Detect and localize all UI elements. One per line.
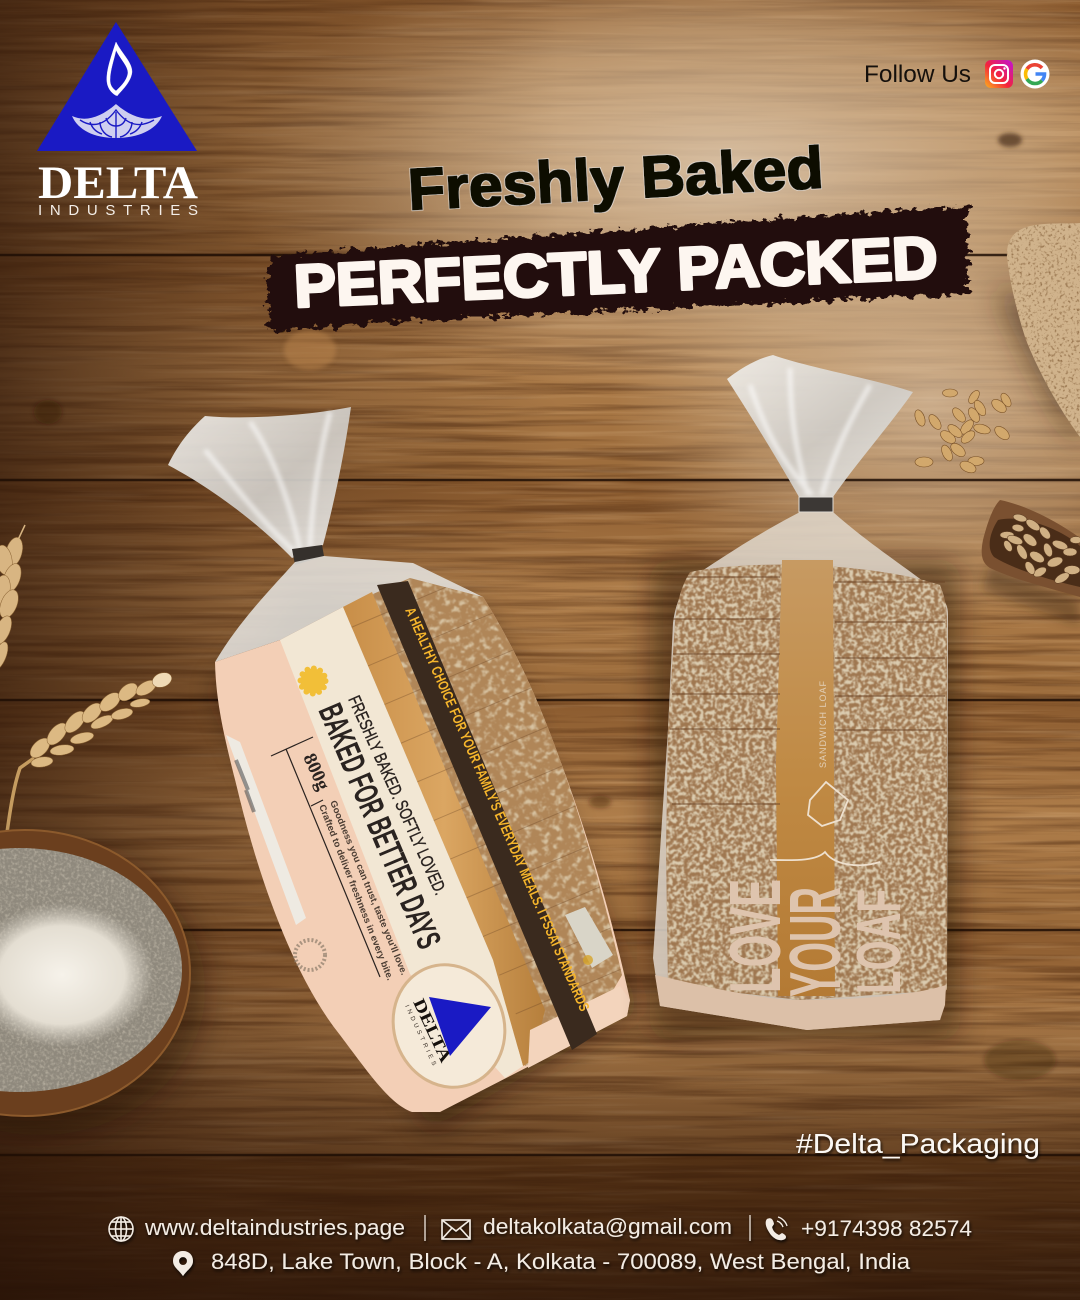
- hashtag: #Delta_Packaging: [796, 1128, 1040, 1159]
- bag shoulder: [215, 556, 483, 662]
- logo wordmark: DELTA: [38, 157, 198, 209]
- badge logo: INDUSTRIES: [403, 1004, 437, 1067]
- logo subline: INDUSTRIES: [38, 202, 198, 219]
- phone number: +9174398 82574: [801, 1216, 972, 1241]
- white side panel: [226, 735, 306, 925]
- website: www.deltaindustries.page: [144, 1215, 405, 1240]
- LOVE YOUR LOAF print: LOAF: [845, 889, 914, 994]
- plastic twist top: [168, 407, 351, 558]
- printed foot: [655, 975, 946, 1030]
- band text: A HEALTHY CHOICE FOR YOUR FAMILY'S EVERYDAY MEALS. I FSSAI STANDARDS: [401, 605, 592, 1014]
- slice lines: [670, 577, 945, 804]
- follow us: [864, 60, 1050, 88]
- banner text: PERFECTLY PACKED: [293, 224, 939, 320]
- icon: yellow flower: [300, 668, 326, 694]
- LOVE YOUR LOAF print: [716, 879, 914, 997]
- badge logo: [376, 949, 522, 1103]
- wheat stalk: diagonal: [6, 670, 174, 840]
- bread sides with speckle: [666, 565, 947, 1000]
- product heading: BAKED FOR BETTER DAYS: [311, 698, 448, 954]
- description: Crafted to deliver freshness in every bite.: [317, 803, 396, 982]
- flour: [0, 848, 182, 1092]
- logo lamp base: [72, 104, 162, 138]
- icon: bread slice outline: [770, 782, 880, 865]
- brush stroke band: [268, 206, 968, 332]
- flour highlight: [0, 903, 154, 1047]
- bread through window: [343, 578, 622, 1066]
- badge logo: DELTA: [409, 996, 456, 1066]
- address: 848D, Lake Town, Block - A, Kolkata - 700089, West Bengal, India: [211, 1249, 911, 1274]
- wheat stalk: left edge: [0, 525, 26, 672]
- bag shadow: [215, 590, 640, 1130]
- central crust: [776, 560, 835, 996]
- headline banner: Perfectly Packed: [268, 206, 968, 332]
- bag shadow: [650, 560, 960, 1040]
- logo: Delta Industries: [37, 22, 198, 219]
- bread slice lines: [352, 587, 621, 1014]
- icon: instagram: [985, 60, 1013, 88]
- logo lamp flame: [107, 42, 132, 96]
- description: Goodness you can trust, taste you'll love.: [328, 799, 410, 976]
- bowl rim: [0, 830, 190, 1116]
- flour bowl: [0, 830, 205, 1135]
- nutrition label: [565, 907, 613, 968]
- bread crust: [343, 592, 545, 1066]
- email: deltakolkata@gmail.com: [483, 1214, 732, 1239]
- LOVE YOUR LOAF print: LOVE: [716, 879, 796, 993]
- LOVE YOUR LOAF print: YOUR: [776, 887, 856, 997]
- icon: location pin: [173, 1251, 193, 1276]
- icon: phone: [766, 1217, 787, 1240]
- headline: Freshly Baked: Freshly Baked: [406, 136, 825, 223]
- wheat grains: [913, 389, 1013, 475]
- burlap sack: [995, 223, 1080, 450]
- small product text: SANDWICH LOAF: [818, 680, 828, 768]
- peach bag body: [215, 597, 630, 1112]
- cream label: [280, 607, 523, 1078]
- peach foot of bag: [528, 986, 630, 1068]
- twist tie: [292, 545, 324, 565]
- twist tie: [799, 497, 833, 512]
- icon: globe: [109, 1217, 133, 1241]
- logo triangle: [37, 22, 197, 151]
- contact footer: [109, 1214, 972, 1276]
- weight: 800g: [298, 750, 334, 794]
- follow us: Follow Us: [864, 61, 971, 88]
- plastic twist top: [727, 355, 913, 497]
- bread bag: tilted, branded front: [168, 407, 672, 1130]
- seal: [295, 940, 325, 970]
- tagline: FRESHLY BAKED. SOFTLY LOVED.: [344, 692, 451, 898]
- icon: google: [1020, 60, 1050, 88]
- wooden scoop of grains: [982, 500, 1080, 625]
- bag body: [653, 512, 948, 1030]
- icon: mail: [442, 1220, 470, 1239]
- dark band: [377, 581, 597, 1050]
- bread bag: upright, clear front: [650, 355, 960, 1040]
